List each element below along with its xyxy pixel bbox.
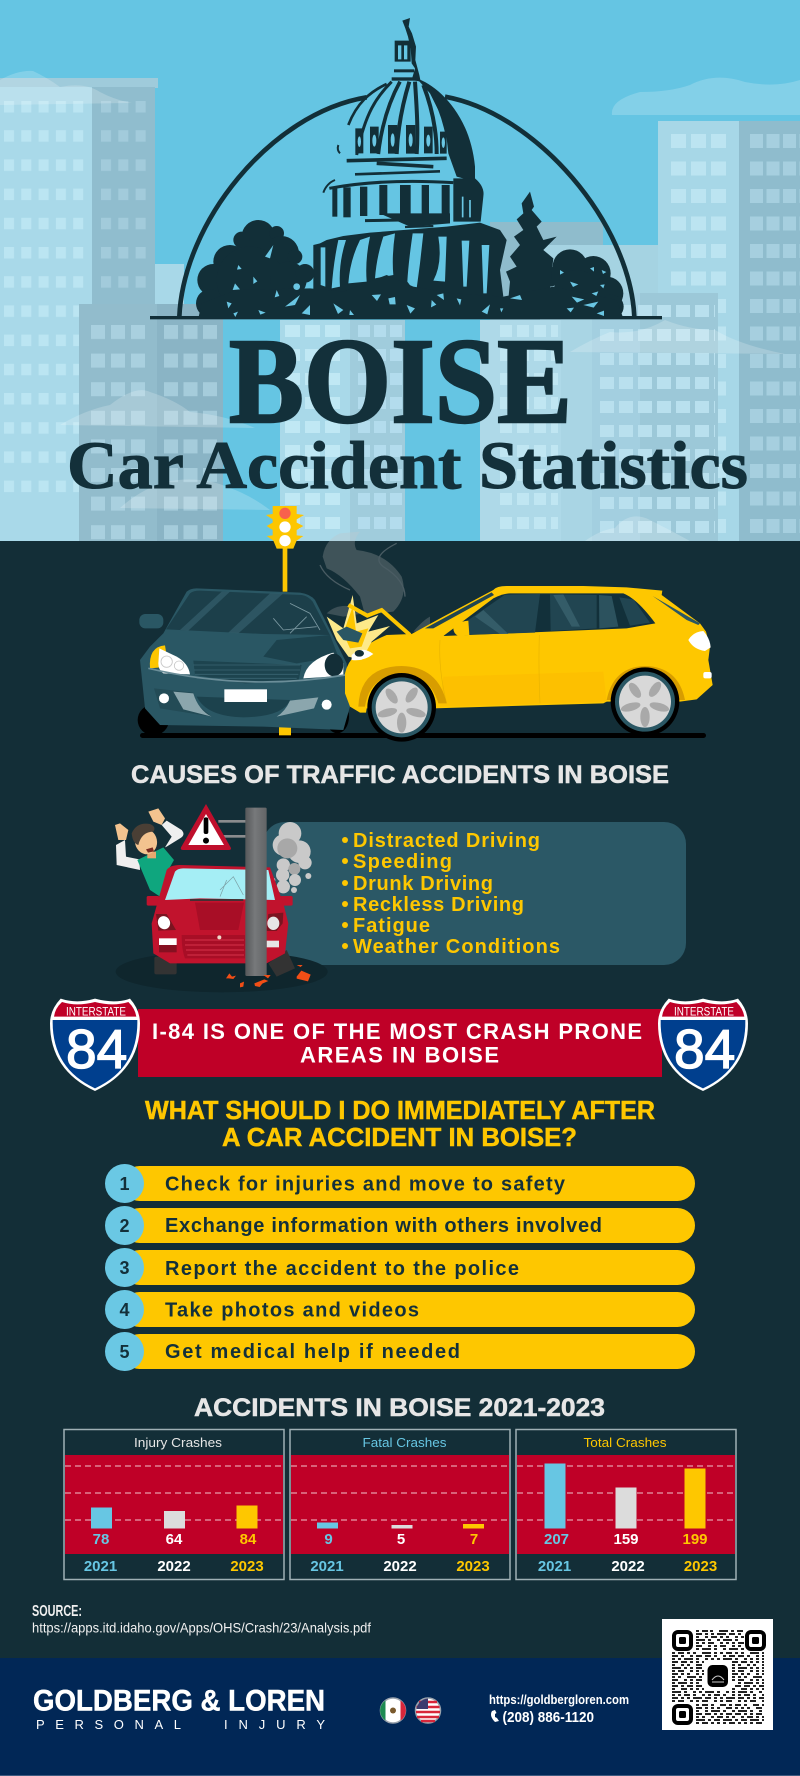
panel: causes list: Distracted Driving	[353, 830, 540, 852]
bar chart: injury crashes	[64, 1430, 284, 1580]
icon: usa flag	[416, 1698, 440, 1723]
traffic light and smoke	[266, 506, 430, 735]
bar chart: injury crashes: 78	[93, 1531, 109, 1548]
bar chart: injury crashes: 2022	[157, 1558, 191, 1575]
icon: interstate 84 shield left: INTERSTATE	[66, 1004, 126, 1018]
dark content background	[0, 541, 800, 1658]
title: BOISE	[229, 314, 572, 449]
firm logo: PERSONAL	[36, 1717, 181, 1732]
yellow car	[345, 586, 713, 742]
header sky background	[0, 0, 800, 541]
icon: phone	[491, 1710, 499, 1722]
ground shadow	[140, 733, 706, 738]
panel: causes list: Weather Conditions	[353, 936, 560, 958]
bar chart: total crashes: 2021	[538, 1558, 571, 1575]
icon: interstate 84 shield right: INTERSTATE	[674, 1004, 734, 1018]
contact details: https://goldbergloren.com	[489, 1692, 629, 1707]
heading: accidents 2021-2023: ACCIDENTS IN BOISE 2021-2023	[194, 1394, 605, 1422]
bar chart: fatal crashes: Fatal Crashes	[362, 1435, 447, 1450]
impact explosion and lifted hood	[327, 595, 410, 660]
title	[67, 314, 748, 503]
panel: causes list	[263, 822, 686, 965]
source text: SOURCE:	[32, 1603, 82, 1620]
panel: causes list: Drunk Driving	[353, 873, 493, 895]
bar chart: total crashes	[516, 1430, 736, 1580]
bar chart: fatal crashes: 2021	[310, 1558, 344, 1575]
step 1: 1	[119, 1174, 130, 1194]
icon: mexico flag	[380, 1698, 406, 1723]
firm logo: GOLDBERG & LOREN	[33, 1684, 325, 1718]
step 4: 4	[119, 1300, 130, 1320]
step 1: Check for injuries and move to safety	[165, 1174, 566, 1196]
heading: what should I do: WHAT SHOULD I DO IMMEDIATELY AFTER	[145, 1095, 655, 1125]
bar chart: fatal crashes: 5	[397, 1531, 405, 1548]
banner: I-84 crash prone	[50, 999, 748, 1091]
footer band	[0, 1658, 800, 1776]
step 4	[105, 1290, 695, 1329]
bar chart: injury crashes: 64	[166, 1531, 183, 1548]
bar chart: injury crashes: 84	[240, 1531, 257, 1548]
bar chart: fatal crashes: 9	[324, 1531, 333, 1548]
banner: I-84 crash prone: AREAS IN BOISE	[300, 1042, 499, 1068]
icon: interstate 84 shield left: 84	[66, 1018, 127, 1080]
bar chart: fatal crashes: 2023	[456, 1558, 490, 1575]
logo: capitol building in arch	[150, 18, 662, 319]
bar chart: total crashes: 2022	[611, 1558, 645, 1575]
bar chart: injury crashes: 2023	[230, 1558, 264, 1575]
icon: interstate 84 shield left	[50, 999, 140, 1091]
bar chart: fatal crashes: 7	[470, 1531, 478, 1548]
source text: https://apps.itd.idaho.gov/Apps/OHS/Crash/23/Analysis.pdf	[32, 1620, 371, 1636]
icon: interstate 84 shield right: 84	[674, 1018, 735, 1080]
banner: I-84 crash prone: I-84 IS ONE OF THE MOST CRASH PRONE	[152, 1019, 642, 1044]
heading: what should I do: A CAR ACCIDENT IN BOISE?	[222, 1122, 577, 1152]
icon: interstate 84 shield right	[658, 999, 748, 1091]
bar chart: fatal crashes	[290, 1430, 510, 1580]
step 2: Exchange information with others involved	[165, 1215, 602, 1237]
crash illustration	[138, 506, 713, 742]
firm logo	[33, 1684, 325, 1732]
bar chart: fatal crashes: 2022	[383, 1558, 417, 1575]
step 5	[105, 1332, 695, 1371]
teal car	[138, 588, 350, 735]
bar chart: total crashes: Total Crashes	[584, 1435, 667, 1450]
bar chart: total crashes: 159	[613, 1531, 639, 1548]
step 3: Report the accident to the police	[165, 1258, 519, 1280]
clouds	[0, 71, 800, 541]
bar chart: total crashes: 2023	[684, 1558, 717, 1575]
header skyline buildings	[0, 78, 800, 541]
step 2	[105, 1206, 695, 1245]
step 5: Get medical help if needed	[165, 1341, 460, 1363]
QR code	[662, 1619, 773, 1730]
step 1	[105, 1164, 695, 1203]
firm logo: INJURY	[224, 1717, 325, 1732]
panel: causes list: Fatigue	[353, 915, 430, 937]
step 3: 3	[119, 1258, 130, 1278]
steps list	[105, 1164, 695, 1371]
panel: causes list: Reckless Driving	[353, 894, 524, 916]
step 2: 2	[119, 1216, 130, 1236]
heading: what should I do	[145, 1095, 655, 1152]
title: Car Accident Statistics	[67, 427, 748, 503]
contact details	[489, 1692, 629, 1726]
contact details: (208) 886-1120	[502, 1709, 594, 1726]
bar chart: injury crashes: 2021	[84, 1558, 117, 1575]
bar chart: total crashes: 207	[544, 1531, 569, 1548]
bar chart: injury crashes: Injury Crashes	[134, 1435, 223, 1450]
source text	[32, 1603, 371, 1636]
bar chart: total crashes: 199	[682, 1531, 708, 1548]
step 4: Take photos and videos	[165, 1300, 419, 1322]
step 5: 5	[119, 1342, 130, 1362]
heading: causes of traffic accidents: CAUSES OF TRAFFIC ACCIDENTS IN BOISE	[131, 761, 669, 789]
panel: causes list: Speeding	[353, 851, 452, 873]
step 3	[105, 1248, 695, 1287]
illustration: man and red car hitting a pole	[115, 804, 328, 992]
